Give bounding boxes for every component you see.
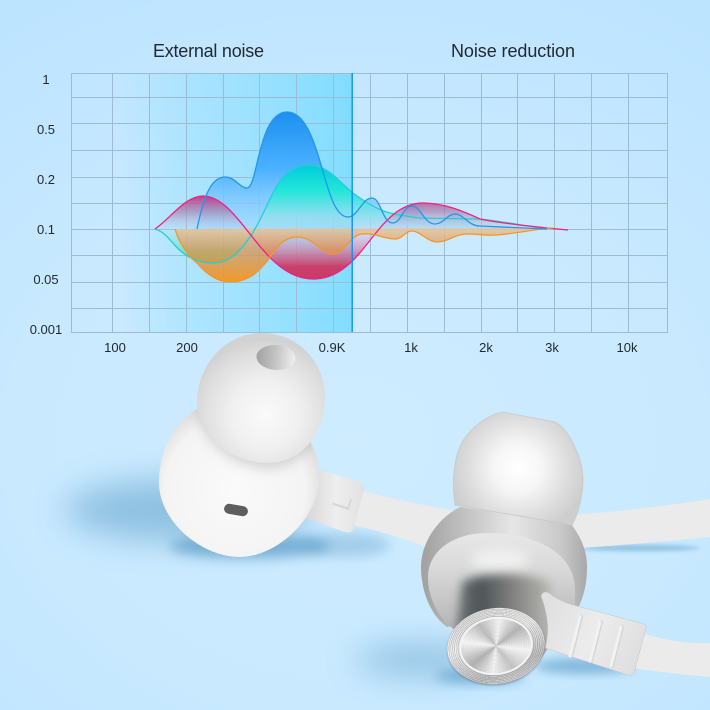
left stem L mark: L: [327, 492, 358, 514]
external noise highlight band: [120, 73, 352, 332]
brushed inner disc: [455, 612, 537, 680]
teal curve area: [155, 165, 543, 263]
left body: [159, 405, 319, 557]
earbud shadows: [65, 478, 700, 683]
x axis labels: 0.9K: [319, 340, 346, 355]
orange curve area: [175, 228, 553, 282]
y axis labels: 0.5: [37, 122, 55, 137]
noise curves chart: [155, 112, 568, 282]
x axis labels: 3k: [545, 340, 559, 355]
tip contact shadow: [194, 410, 312, 472]
y axis labels: 0.001: [30, 322, 62, 337]
divider between external noise and noise reduction: [352, 73, 353, 332]
y axis labels: [30, 72, 62, 337]
x axis labels: 2k: [479, 340, 493, 355]
chart grid: [71, 73, 668, 332]
x axis labels: 1k: [404, 340, 418, 355]
y axis labels: 0.05: [33, 272, 59, 287]
x axis labels: [104, 340, 638, 355]
right stem: [541, 592, 646, 675]
left ear tip: [197, 333, 325, 463]
heading: External noise: External noise: [153, 41, 264, 61]
left stem: [305, 470, 364, 533]
stem ribs: [570, 617, 622, 666]
ear tip opening: [256, 344, 296, 371]
x axis labels: 100: [104, 340, 126, 355]
y axis labels: 0.1: [37, 222, 55, 237]
curve outlines: [155, 112, 568, 282]
blue curve area: [197, 112, 547, 229]
housing shading: [452, 548, 553, 633]
silver ring: [421, 507, 587, 627]
pink curve area: [155, 196, 568, 279]
x axis labels: 10k: [617, 340, 638, 355]
right ear tip: [453, 412, 583, 525]
x axis labels: 200: [176, 340, 198, 355]
flat cable sections: [355, 490, 710, 677]
housing: [428, 533, 575, 660]
y axis labels: 0.2: [37, 172, 55, 187]
mic slot: [223, 503, 249, 517]
right earbud: [421, 412, 646, 675]
y axis labels: 1: [42, 72, 50, 87]
heading: Noise reduction: Noise reduction: [451, 41, 575, 61]
metal end cap disc: [442, 602, 550, 690]
left earbud: [159, 333, 364, 557]
